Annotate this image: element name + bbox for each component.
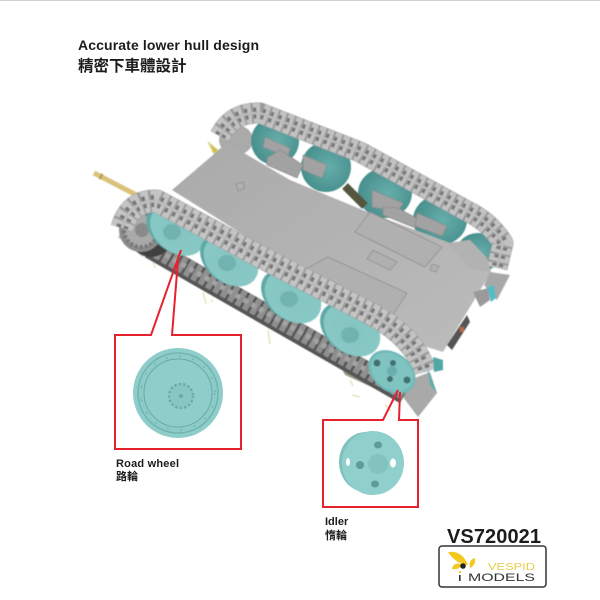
callout: road wheel	[115, 250, 241, 449]
title: Accurate lower hull design	[78, 37, 259, 53]
under body plate	[340, 365, 405, 400]
suspension arms	[263, 137, 447, 236]
gun barrel	[94, 173, 144, 199]
label: idler	[325, 516, 349, 542]
idler detail	[339, 431, 404, 495]
logo: Vespid Models	[439, 546, 546, 587]
lower track run	[150, 246, 405, 394]
rear detail	[447, 272, 510, 350]
far road wheels	[251, 117, 500, 273]
teal rear hubs	[433, 357, 443, 372]
label: road wheel	[116, 458, 179, 483]
title	[78, 37, 259, 75]
hull panels and hatches	[236, 182, 442, 315]
rear base plate	[397, 372, 437, 417]
logo: Vespid Models: VESPID	[488, 561, 536, 573]
hull	[172, 143, 491, 352]
front plate	[118, 230, 144, 257]
near track upper run	[122, 201, 425, 372]
callout: idler	[323, 390, 418, 507]
road wheel detail	[133, 348, 223, 438]
hull rear dome	[447, 240, 491, 272]
idler on tank	[360, 341, 424, 403]
far track upper run	[220, 113, 503, 268]
title: 精密下車體設計	[78, 56, 187, 75]
label: idler: Idler	[325, 516, 349, 528]
far idler	[219, 125, 253, 155]
top edge line	[0, 0, 600, 1]
near road wheels	[137, 194, 391, 367]
logo: Vespid Models: MODELS	[468, 572, 535, 584]
dark gap under track	[345, 186, 365, 206]
product code: VS720021	[447, 526, 541, 548]
icon: wasp	[448, 552, 475, 581]
label: road wheel: Road wheel	[116, 458, 179, 470]
label: road wheel: 路輪	[116, 469, 138, 483]
sprocket	[119, 208, 173, 257]
label: idler: 惰輪	[325, 528, 347, 542]
yellow sprue bits	[153, 142, 391, 411]
tank model	[94, 113, 510, 417]
